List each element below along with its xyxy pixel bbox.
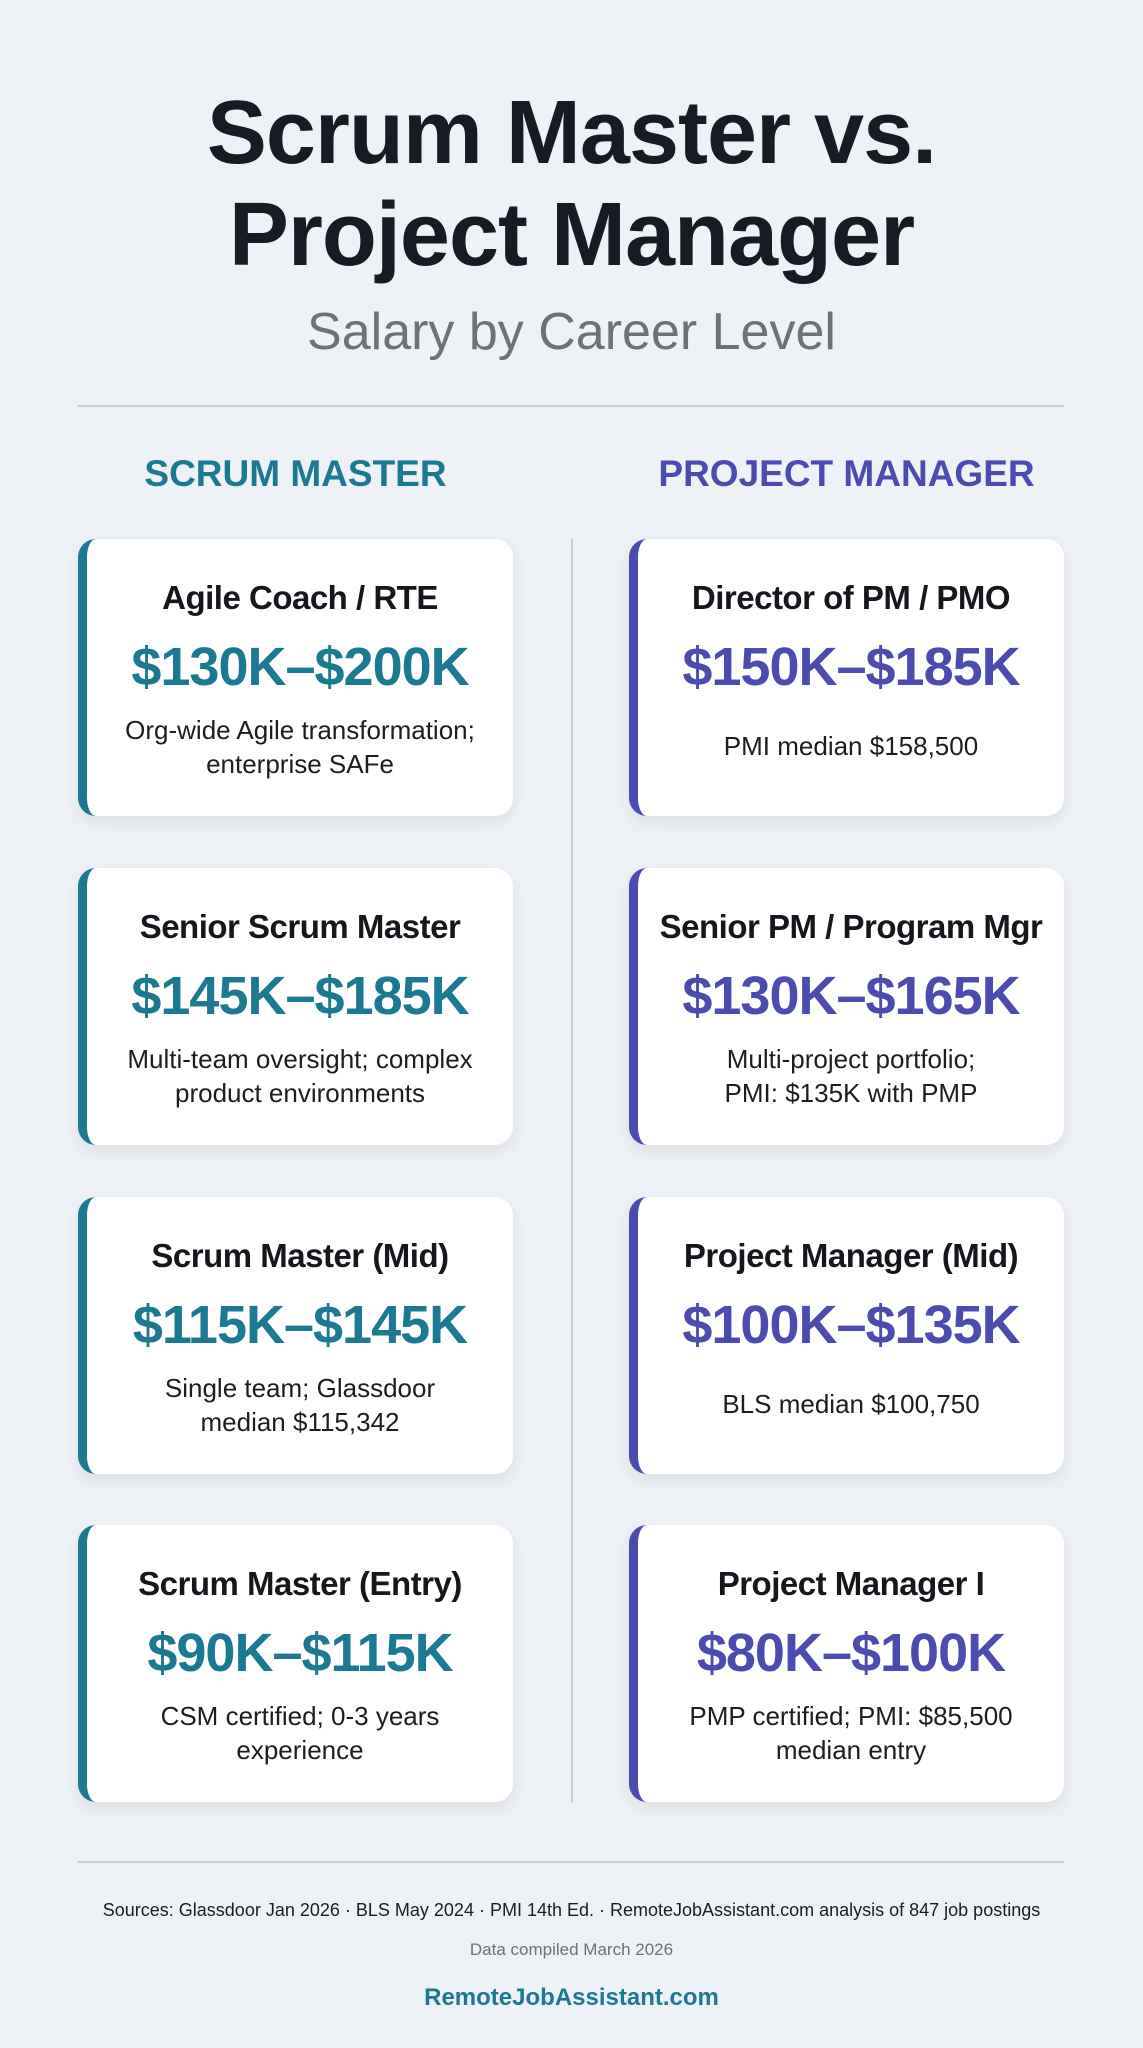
card: project manager mid: Project Manager (Mid) — [684, 1237, 1018, 1274]
card: project manager I — [629, 1525, 1064, 1802]
card: project manager mid: $100K–$135K — [682, 1295, 1020, 1355]
card: scrum master mid — [78, 1197, 513, 1474]
card: scrum master mid: Single team; Glassdoor — [165, 1373, 435, 1403]
card: scrum master entry: Scrum Master (Entry) — [138, 1565, 462, 1602]
card: project manager I: PMP certified; PMI: $85,500 — [689, 1701, 1013, 1731]
column: project manager — [628, 539, 1065, 1809]
card: agile coach: $130K–$200K — [131, 637, 469, 697]
card: scrum master mid: median $115,342 — [200, 1407, 400, 1437]
card: scrum master entry: experience — [236, 1735, 364, 1765]
card: project manager I: $80K–$100K — [697, 1623, 1005, 1683]
heading: project manager: PROJECT MANAGER — [658, 453, 1035, 494]
subtitle: Salary by Career Level — [307, 303, 836, 361]
card: scrum master entry: $90K–$115K — [147, 1623, 453, 1683]
card: scrum master mid: $115K–$145K — [133, 1295, 467, 1355]
card: senior scrum master — [78, 868, 513, 1145]
card: senior scrum master: Multi-team oversight; complex — [127, 1044, 473, 1074]
card: scrum master entry — [78, 1525, 513, 1802]
card: scrum master mid: Scrum Master (Mid) — [151, 1237, 449, 1274]
heading: scrum master: SCRUM MASTER — [144, 453, 447, 494]
card: senior pm: Senior PM / Program Mgr — [660, 908, 1042, 945]
title: Scrum Master vs. — [207, 83, 936, 183]
card: senior scrum master: Senior Scrum Master — [140, 908, 460, 945]
card: senior pm: $130K–$165K — [682, 966, 1020, 1026]
compiled note: Data compiled March 2026 — [470, 1940, 673, 1959]
card: project manager mid — [629, 1197, 1064, 1474]
card: director of pm — [629, 539, 1064, 816]
brand: RemoteJobAssistant.com — [424, 1984, 719, 2011]
card: senior scrum master: product environments — [175, 1078, 425, 1108]
title — [207, 83, 936, 285]
card: director of pm: $150K–$185K — [682, 637, 1020, 697]
title: Project Manager — [229, 185, 914, 285]
card: agile coach — [78, 539, 513, 816]
sources: Sources: Glassdoor Jan 2026 · BLS May 2024 · PMI 14th Ed. · RemoteJobAssistant.com analysis of 847 job postings — [103, 1900, 1040, 1920]
card: project manager mid: BLS median $100,750 — [722, 1389, 980, 1419]
card: project manager I: median entry — [776, 1735, 926, 1765]
card: senior pm: PMI: $135K with PMP — [725, 1078, 977, 1108]
card: senior scrum master: $145K–$185K — [131, 966, 469, 1026]
card: scrum master entry: CSM certified; 0-3 years — [161, 1701, 439, 1731]
card: agile coach: enterprise SAFe — [206, 749, 394, 779]
card: director of pm: PMI median $158,500 — [724, 731, 978, 761]
card: director of pm: Director of PM / PMO — [692, 579, 1010, 616]
card: senior pm — [629, 868, 1064, 1145]
card: agile coach: Agile Coach / RTE — [162, 579, 438, 616]
card: project manager I: Project Manager I — [718, 1565, 984, 1602]
column: scrum master — [77, 539, 514, 1809]
card: agile coach: Org-wide Agile transformation; — [125, 715, 475, 745]
card: senior pm: Multi-project portfolio; — [727, 1044, 975, 1074]
